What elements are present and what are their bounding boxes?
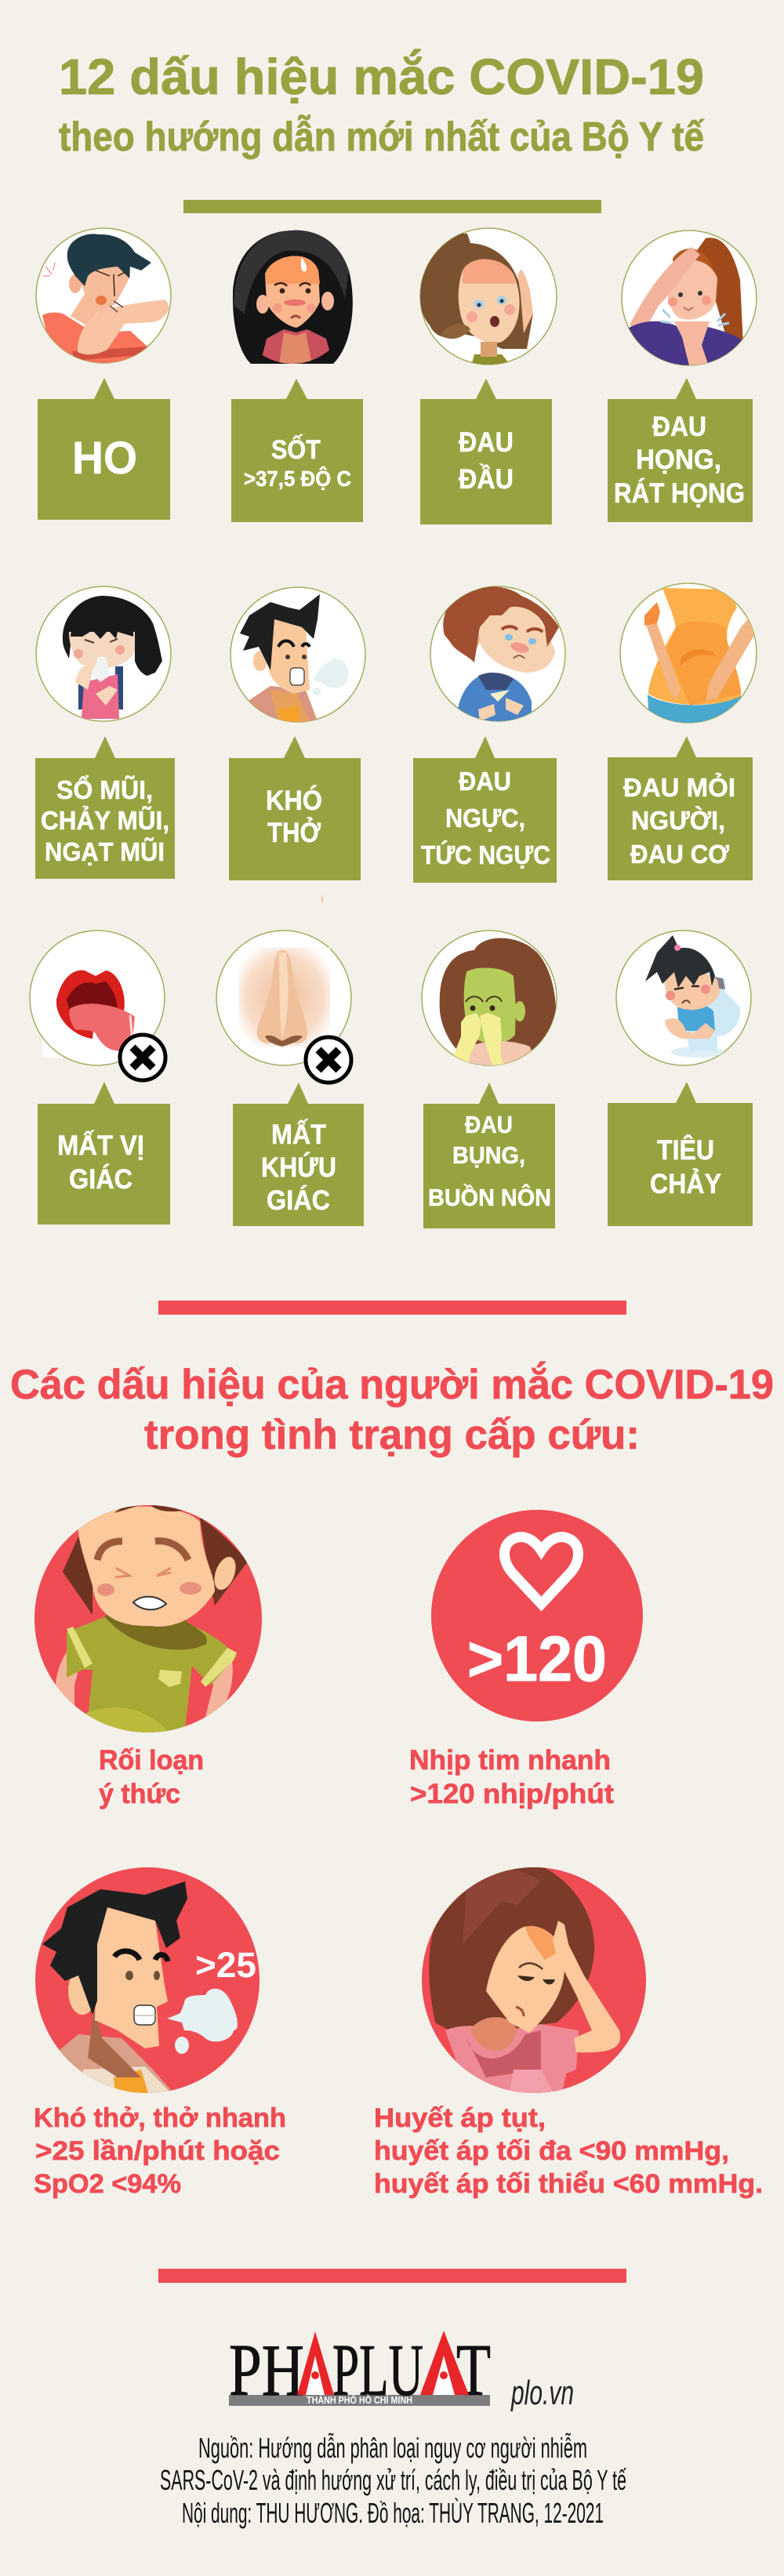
icon: mouth and tongue with cross badge [30,931,165,1080]
label box: headache: ĐAU [459,427,514,458]
caption: heart rate: Nhịp tim nhanh [409,1745,611,1776]
logo: Pháp Luật [229,2330,491,2411]
label box: sore throat: RÁT HỌNG [614,477,745,509]
label box: loss of taste: GIÁC [69,1163,132,1195]
label box: sore throat: ĐAU [652,412,706,442]
caption: fast breathing [34,2103,286,2199]
label box: body aches: NGƯỜI, [631,806,725,835]
title: theo hướng dẫn mới nhất của Bộ Y tế [59,114,704,160]
label box: sore throat: HỌNG, [636,444,721,475]
caption: heart rate: >120 nhịp/phút [410,1779,614,1809]
label box: loss of smell [233,1083,364,1226]
icon: confused boy [34,1489,262,1736]
label box: headache: ĐẦU [459,463,514,495]
badge: no taste [120,1035,165,1080]
label box: diarrhea: TIÊU [657,1134,714,1166]
icon: man breathing fast [35,1867,260,2101]
badge: no smell [306,1037,351,1083]
heading: emergency signs: Các dấu hiệu của người mắc COVID-19 [10,1361,774,1408]
label box: nausea: ĐAU [465,1111,513,1138]
label box: body aches: ĐAU CƠ [630,840,730,869]
label box: ho [38,378,170,520]
caption: blood pressure: huyết áp tối đa <90 mmHg, [374,2136,729,2166]
label box: nausea: BUỒN NÔN [428,1183,551,1211]
caption: blood pressure [374,2103,763,2199]
caption: blood pressure: Huyết áp tụt, [374,2103,546,2133]
icon: child on toilet [616,931,751,1065]
label box: headache [420,379,552,524]
panel: fast heart rate [409,1510,643,1809]
title: 12 dấu hiệu mắc COVID-19 [59,49,704,105]
caption: fast breathing: Khó thở, thở nhanh [34,2103,286,2133]
title [59,49,704,160]
icon: heart with 120 [431,1510,643,1722]
icon: girl with runny nose [36,586,171,721]
caption: confusion: ý thức [99,1779,180,1809]
label box: runny nose: SỔ MŨI, [56,775,153,804]
caption: fast breathing: SpO2 <94% [34,2169,181,2199]
olive heading bar [183,200,601,213]
label box: fever: >37,5 ĐỘ C [244,466,351,491]
label box: runny nose: CHẢY MŨI, [41,806,169,835]
label box: fever [231,379,363,522]
heading: emergency signs: trong tình trạng cấp cứu: [144,1412,640,1458]
icon: woman with body aches [620,583,757,725]
label box: loss of smell: GIÁC [267,1185,330,1216]
icon: man short of breath [230,587,365,725]
caption: blood pressure: huyết áp tối thiểu <60 mmHg. [374,2169,763,2199]
icon: man breathing fast: >25 [195,1945,256,1985]
icon: dizzy woman [422,1863,646,2101]
label box: loss of smell: MẤT [271,1119,326,1150]
icon: boy with chest pain [430,586,565,725]
caption: confusion: Rối loạn [99,1745,204,1776]
heading: emergency signs [10,1361,774,1458]
icon: woman with fever [233,230,353,364]
caption: heart rate [409,1745,614,1809]
icon: heart with 120: >120 [467,1624,607,1695]
source credits [160,2432,626,2529]
red divider bottom [158,2269,626,2283]
logo: Pháp Luật: PH [229,2330,304,2411]
label box: loss of taste [38,1082,170,1225]
label box: runny nose: NGẠT MŨI [45,837,165,866]
label box: chest pain: ĐAU [459,767,511,796]
icon: nauseous girl [422,931,557,1082]
icon: girl with headache [420,228,557,368]
label box: shortness of breath [229,736,361,880]
label box: nausea [423,1083,555,1228]
label box: body aches [608,736,753,880]
label box: body aches: ĐAU MỎI [623,773,735,802]
label box: sore throat [608,378,753,522]
logo: Pháp Luật: THÀNH PHỐ HỒ CHÍ MINH [307,2394,412,2406]
label box: chest pain: NGỰC, [445,804,525,833]
caption: fast breathing: >25 lần/phút hoặc [35,2136,280,2166]
caption: confusion [99,1745,204,1809]
label box: ho: HO [72,433,137,484]
label box: runny nose [35,736,175,879]
logo: Pháp Luật: PLU [332,2330,423,2411]
label box: nausea: BỤNG, [452,1141,525,1169]
panel: confusion [34,1489,262,1809]
panel: low blood pressure [374,1863,763,2199]
label box: diarrhea: CHẢY [650,1168,721,1199]
icon: woman with sore throat [622,230,757,368]
label box: fever: SỐT [271,434,321,465]
panel: fast breathing [34,1867,286,2199]
label box: chest pain [413,736,557,883]
icon: man coughing [36,228,171,368]
label box: chest pain: TỨC NGỰC [421,840,550,869]
logo: Pháp Luật: T [456,2330,491,2411]
icon: nose with cross badge [216,931,351,1083]
label box: shortness of breath: KHÓ [266,785,322,816]
label box: loss of smell: KHỨU [261,1152,336,1183]
logo text: plo.vn: plo.vn [510,2374,574,2412]
label box: loss of taste: MẤT VỊ [57,1130,144,1161]
red divider top [158,1301,626,1315]
label box: diarrhea [608,1082,753,1226]
label box: shortness of breath: THỞ [267,817,321,848]
